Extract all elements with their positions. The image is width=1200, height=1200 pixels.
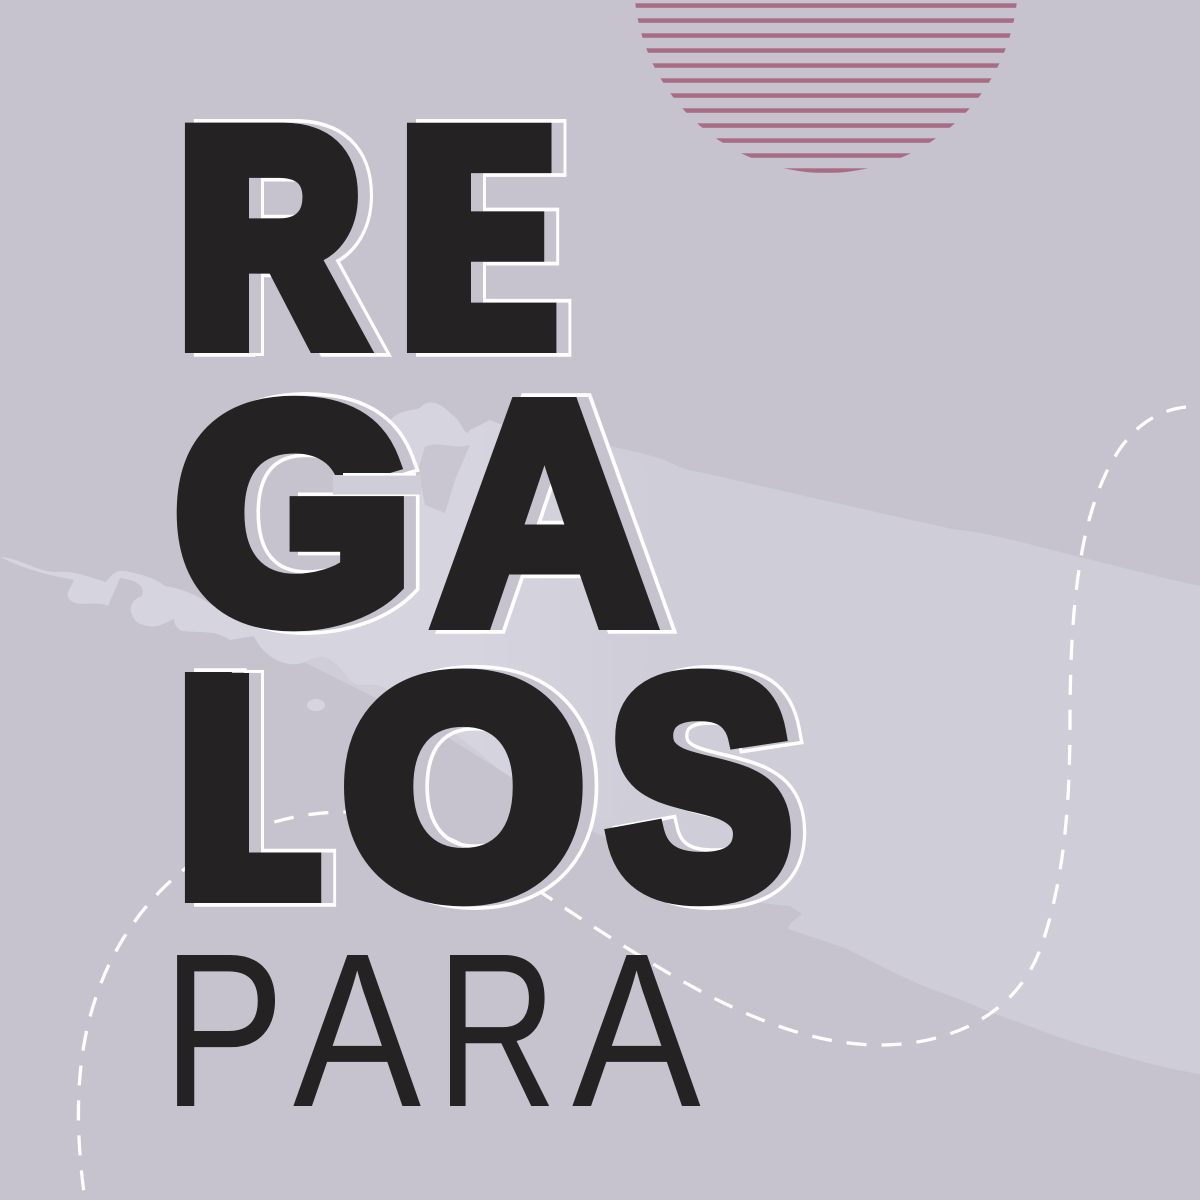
offset outline layer: R xyxy=(189,67,375,407)
offset outline layer: G xyxy=(188,345,423,680)
offset outline layer: A xyxy=(444,336,669,689)
offset fill layer: O xyxy=(356,618,595,956)
striped semicircle xyxy=(635,3,1017,173)
offset fill layer: R xyxy=(189,67,375,407)
subtitle: PARA xyxy=(162,907,701,1153)
dashed curved line xyxy=(78,407,1186,1200)
offset outline layer xyxy=(187,64,804,962)
solid letters: O xyxy=(344,618,583,956)
offset fill layer xyxy=(187,64,804,962)
solid letters xyxy=(175,64,792,962)
G aperture cut xyxy=(333,473,421,494)
title: REGALOS xyxy=(175,64,804,962)
offset outline layer: L xyxy=(187,613,335,962)
offset fill layer: A xyxy=(444,336,669,689)
solid letters: R xyxy=(177,67,363,407)
solid letters: G xyxy=(176,345,411,680)
offset outline layer: E xyxy=(409,64,572,412)
offset fill layer: L xyxy=(187,613,335,962)
offset fill layer: E xyxy=(409,64,572,412)
offset outline layer: S xyxy=(620,616,804,958)
offset fill layer: S xyxy=(620,616,804,958)
subtitle: PARA: P xyxy=(162,908,285,1153)
brush stroke texture xyxy=(0,402,1200,1074)
subtitle: PARA: A xyxy=(572,907,701,1153)
offset outline layer: O xyxy=(356,618,595,956)
offset fill layer: G xyxy=(188,345,423,680)
subtitle: PARA: A xyxy=(293,907,421,1153)
subtitle: PARA: R xyxy=(436,908,557,1153)
solid letters: S xyxy=(608,616,792,958)
solid letters: A xyxy=(432,336,657,689)
solid letters: E xyxy=(397,64,560,412)
solid letters: L xyxy=(175,613,323,962)
